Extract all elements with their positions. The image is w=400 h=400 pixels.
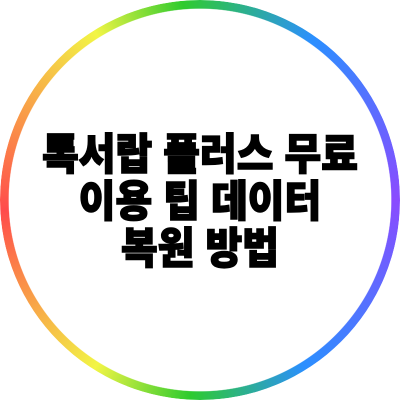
title: 복원 방법 [121, 226, 279, 274]
title: 톡서랍 플러스 무료 [42, 132, 358, 180]
title [42, 132, 358, 274]
title: 이용 팁 데이터 [79, 179, 321, 227]
